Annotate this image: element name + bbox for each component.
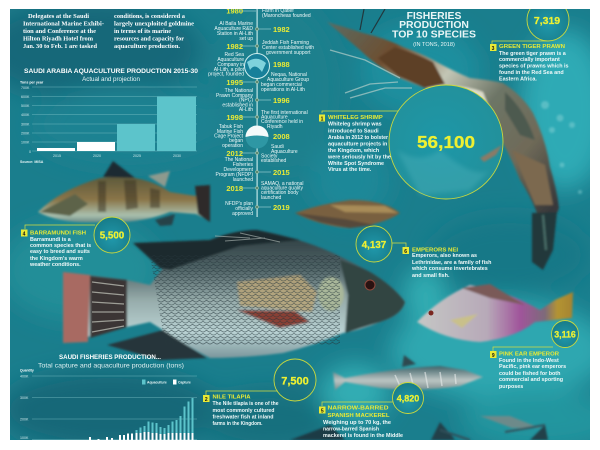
callout: 5,500 barramundi fish: 4 [23,231,26,237]
timeline entries left: set up [239,36,253,42]
callout: 7,500 nile tilapia [203,359,316,427]
callout: 3,116 pink ear emperor: 3,116 [554,330,576,340]
timeline dates right: 2008 [273,132,290,141]
timeline entries left: The National [225,88,253,94]
y axis labels: 0 [29,150,31,154]
y axis labels: 100K [20,436,29,440]
timeline entries right: Saudi [271,144,284,150]
timeline entries right: Neqaa, National [271,72,307,78]
callout: 3,116 pink ear emperor: 9 [492,353,495,359]
timeline photo circle 2008 [246,126,268,148]
y axis labels: 300K [20,396,29,400]
x axis labels: 2025 [133,154,141,158]
y axis labels [21,86,31,154]
timeline entries right: Aquaculture [271,149,298,155]
timeline entries left: Tabuk Fish [219,124,243,130]
callout: 4,820 narrow-barred Spanish mackerel: narrow-barred Spanish [323,426,379,432]
callout: 4,137 emperors nei: 6 [404,249,407,255]
timeline dates right: 1996 [273,96,290,105]
y axis labels: 400K [21,113,30,117]
top intro text: tion and Conference at the [23,28,96,35]
timeline dates left: 2018 [226,184,243,193]
timeline entries left: Fisheries [233,162,253,168]
callout: 56,100 whiteleg shrimp: were seriously hit by the [327,154,391,160]
callout: 3,116 pink ear emperor: could be fished for both [499,371,560,377]
timeline dates right [273,25,290,212]
timeline entries left: established in [222,102,253,108]
y axis labels: 200K [21,132,30,136]
bar chart: Saudi fisheries production [20,355,197,440]
heading: fisheries production top 10 species: TOP 10 SPECIES [392,30,476,40]
top intro text: Jan. 30 to Feb. 1 are tasked [23,43,97,50]
timeline entries right: established [261,158,287,164]
callout: 4,820 narrow-barred Spanish mackerel: Weighing up to 70 kg, the [323,420,391,426]
timeline entries right: aquaculture quality [261,186,303,192]
callout: 56,100 whiteleg shrimp: Virus at the time. [328,167,372,173]
chart subtitle: Actual and projection [82,76,140,83]
heading: fisheries production top 10 species: FISHERIES [407,11,461,22]
bar chart: aquaculture production 2015-30 [20,68,198,164]
axis title: Quantity [20,368,34,372]
callout: 4,820 narrow-barred Spanish mackerel [319,382,424,439]
callout: 56,100 whiteleg shrimp: Whiteleg shrimp was [328,122,382,128]
callout: 56,100 whiteleg shrimp: the Kingdom, which [328,148,379,154]
heading: fisheries production top 10 species [392,11,476,48]
timeline entries left: NFDP's plan [225,201,253,207]
y axis labels: 300K [21,122,30,126]
timeline entries right: launched [261,195,282,201]
timeline entries left: Al-Lith, a pilot [214,67,245,73]
callout: 4,820 narrow-barred Spanish mackerel: NARROW-BARRED [328,406,388,412]
callout: 4,137 emperors nei: Lethrinidae, are a family of fish [412,260,491,266]
timeline entries left: Al-Lith [239,107,253,113]
callout: 5,500 barramundi fish [21,217,130,268]
bars [37,96,196,151]
callout: 5,500 barramundi fish: BARRAMUNDI FISH [30,230,86,236]
callout: 7,319 green tiger prawn: 7,319 [534,15,560,27]
timeline entries left: Station in Al-Lith [217,31,253,37]
callout: 3,116 pink ear emperor [490,320,578,390]
callout: 3,116 pink ear emperor: Found in the Indo-West [499,358,559,364]
callout: 4,137 emperors nei: EMPERORS NEI [412,248,458,254]
timeline entries right: Center established with [262,45,314,51]
callout: 4,820 narrow-barred Spanish mackerel: 5 [321,408,324,414]
callout: 7,319 green tiger prawn: 3 [492,46,495,52]
callout: 5,500 barramundi fish: 5,500 [100,230,125,242]
timeline entries right: Aquaculture [261,114,288,120]
illustration: small fish and crab at bottom [290,416,548,440]
callout: 7,319 green tiger prawn: GREEN TIGER PRAWN [499,44,565,50]
callout: 7,500 nile tilapia: The Nile tilapia is one of the [212,401,278,407]
timeline entries right: Aquaculture Group [267,77,309,83]
callout: 7,319 green tiger prawn: species of prawns which is [499,64,569,70]
axis title: Tons per year [20,80,44,84]
timeline entries right: (Maroncheas founded [262,13,311,19]
callout: 56,100 whiteleg shrimp: White Spot Syndrome [328,161,384,167]
timeline entries left: Marine Fish [217,129,243,135]
chart subtitle: Total capture and aquaculture production (tons) [38,364,184,370]
timeline entries left: operation [222,143,243,149]
timeline entries right: The first international [261,110,308,116]
timeline [208,6,314,217]
callout: 3,116 pink ear emperor: PINK EAR EMPEROR [499,352,560,358]
illustration: whiteleg shrimp [327,9,559,270]
y axis labels: 700K [21,86,30,90]
callout: 7,319 green tiger prawn: The green tiger prawn is a [499,51,567,57]
callout: 56,100 whiteleg shrimp: WHITELEG SHRIMP [328,115,383,121]
timeline entries left: project, founded [208,72,244,78]
timeline dates left: 1980 [226,6,243,16]
top intro text: conditions, is considered a [114,13,186,20]
timeline entries right: Jeddah Fish Farming [262,40,309,46]
callout: 56,100 whiteleg shrimp: 1 [321,116,324,122]
timeline entries right: Conference held in [261,119,303,125]
timeline entries right [261,8,314,201]
source: Source: MISA [20,160,44,164]
illustration: narrow-barred Spanish mackerel [333,355,483,390]
callout: 7,500 nile tilapia: 7,500 [281,376,309,388]
timeline dates right: 2015 [273,168,290,177]
timeline entries left: Cage Project [214,134,244,140]
callout: 5,500 barramundi fish: common species that is [30,243,91,249]
x axis labels: 2015 [53,154,61,158]
callout: 7,500 nile tilapia: farms in the Kingdom. [212,421,263,427]
callout: 7,500 nile tilapia: freshwater fish at inland [212,414,274,420]
heading: fisheries production top 10 species: PRODUCTION [399,20,469,31]
y axis labels: 200K [20,418,29,422]
callout: 7,319 green tiger prawn: found in the Red Sea and [499,70,564,76]
top intro text: resources and capacity for [114,36,184,42]
callout: 56,100 whiteleg shrimp: 56,100 [417,132,475,152]
callout: 3,116 pink ear emperor: commercial and sporting [499,377,563,383]
timeline entries left: officially [235,206,253,212]
timeline dates right: 1988 [273,60,290,69]
callout: 3,116 pink ear emperor: Pacific, pink ear emperors [499,364,566,370]
timeline entries left: Aquaculture [217,57,244,63]
callout: 56,100 whiteleg shrimp: Arabia in 2012 to bolster [328,135,389,141]
timeline entries right: government support [266,50,311,56]
callout: 4,137 emperors nei: which consume invertebrates [411,266,488,272]
timeline dates right: 1982 [273,25,290,34]
heading: fisheries production top 10 species: (IN TONS, 2018) [413,42,455,48]
timeline entries right: began commercial [261,82,302,88]
illustration: pink ear emperor [417,284,573,342]
timeline entries right: Farm in Qatief [262,8,294,14]
top intro text: Delegates at the Saudi [28,13,89,20]
timeline entries right: Riyadh [267,124,283,130]
callout: 4,137 emperors nei: 4,137 [362,240,387,251]
top intro text: aquaculture production. [114,43,180,50]
y axis labels: 400K [20,374,29,378]
timeline dates left [226,6,243,193]
bubbles [541,101,582,194]
y axis labels: 100K [21,140,30,144]
top intro text: Hilton Riyadh Hotel from [23,36,93,42]
chart title: SAUDI ARABIA AQUACULTURE PRODUCTION 2015-30 [24,68,198,75]
legend [142,380,191,384]
timeline entries right: Society [261,154,278,160]
callout: 5,500 barramundi fish: Barramundi is a [30,237,72,243]
top intro text: in terms of its marine [114,28,171,35]
callout: 7,500 nile tilapia: NILE TILAPIA [212,394,251,400]
callout: 7,319 green tiger prawn [490,9,570,80]
callout: 7,319 green tiger prawn: Eastern Africa. [499,76,537,82]
timeline entries left: The National [225,157,253,163]
y axis labels [20,374,29,440]
callout: 56,100 whiteleg shrimp [319,85,503,199]
callout: 5,500 barramundi fish: easy to breed and suits [30,249,90,255]
callout: 4,820 narrow-barred Spanish mackerel: 4,820 [397,394,419,404]
timeline entries left: Prawn Company [216,93,253,99]
illustration: emperors nei fish [295,200,400,228]
timeline entries left: began [229,138,243,144]
callout: 4,137 emperors nei [356,226,491,279]
callout: 7,319 green tiger prawn: commercially important [499,57,560,63]
timeline photo circle 1988 [244,54,270,78]
timeline dates left: 1995 [226,78,243,87]
top intro text: largely unexploited goldmine [114,20,194,28]
timeline dates left: 1998 [226,113,243,122]
timeline dates left: 2012 [226,149,243,158]
y axis labels: 600K [21,95,30,99]
callout: 7,500 nile tilapia: most commonly cultured [212,408,274,414]
timeline entries left: Red Sea [225,52,244,58]
x axis labels [53,154,181,157]
timeline entries left: (NPC) [239,98,253,104]
timeline entries left: Aquaculture R&D [214,26,253,32]
timeline entries left [208,21,254,217]
timeline entries left: approved [232,211,253,217]
callout: 5,500 barramundi fish: the Kingdom's warm [30,256,83,262]
bars [136,398,194,434]
callout: 4,137 emperors nei: Emperors, also known as [412,253,477,259]
timeline dates left: 1982 [226,42,243,51]
top intro text: International Marine Exhibi- [23,20,104,28]
callout: 4,137 emperors nei: and small fish. [412,273,450,279]
timeline entries left: launched [233,177,253,183]
x axis labels: 2020 [93,154,101,158]
callout: 4,820 narrow-barred Spanish mackerel: mackerel is found in the Middle [323,433,403,439]
callout: 7,500 nile tilapia: 2 [205,397,208,403]
timeline entries left: Development [224,167,254,173]
timeline entries left: Program (NFDP) [215,172,253,178]
illustration: barramundi fish [38,161,210,226]
timeline entries right: certification body [261,190,299,196]
legend: Aquaculture [147,380,167,384]
callout: 4,820 narrow-barred Spanish mackerel: SPANISH MACKEREL [328,413,390,419]
timeline entries right: operations in Al-Lith [261,87,305,93]
illustration: nile tilapia [63,230,405,360]
chart title: SAUDI FISHERIES PRODUCTION... [59,355,161,361]
callout: 5,500 barramundi fish: weather conditions. [29,262,81,268]
timeline entries left: Al Baila Marine [219,21,253,27]
timeline entries right: SAMAQ, a national [261,181,304,187]
callout: 3,116 pink ear emperor: purposes [499,384,523,390]
callout: 56,100 whiteleg shrimp: aquaculture projects in [328,142,387,148]
callout: 56,100 whiteleg shrimp: introduced to Saudi [328,128,379,134]
timeline dates right: 2019 [273,203,290,212]
y axis labels: 500K [21,104,30,108]
timeline entries left: Company in [217,62,244,68]
legend: Capture [178,380,191,384]
top intro text [23,13,194,50]
x axis labels: 2030 [173,154,181,158]
